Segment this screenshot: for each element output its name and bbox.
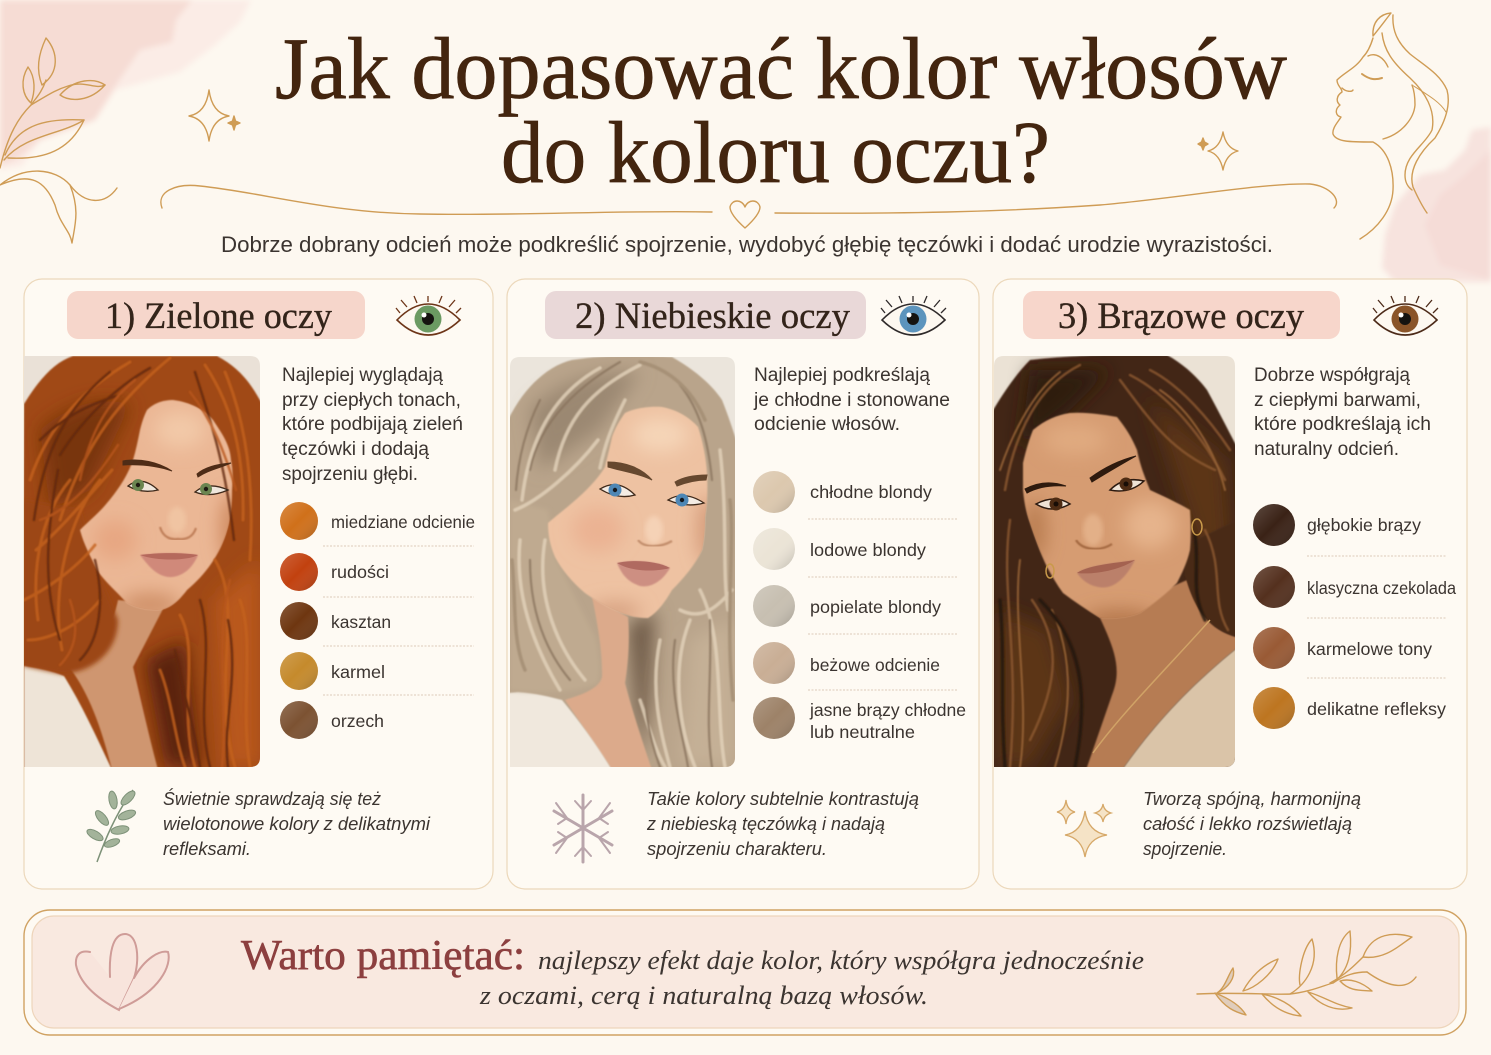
banner: remember (24, 910, 1466, 1035)
sparkle: top right (1198, 132, 1238, 170)
description text: przy ciepłych tonach, (282, 390, 461, 411)
face features (600, 462, 707, 586)
flourish with heart (161, 184, 1337, 228)
heading: green eyes (67, 291, 365, 339)
watercolor: bottom right of header (1382, 127, 1491, 282)
heading: brown eyes: 3) Brązowe oczy (1058, 296, 1304, 337)
icon: green sprig (85, 789, 137, 862)
face shading (1024, 424, 1176, 630)
note text: spojrzenie. (1143, 839, 1227, 859)
swatch list: jasne brązy chłodne (809, 700, 966, 720)
swatch list: lodowe blondy (810, 540, 926, 560)
leaves: top left line art (0, 38, 117, 243)
hair shading (530, 372, 735, 767)
swatch list: delikatne refleksy (1307, 699, 1446, 719)
heading: blue eyes: 2) Niebieskie oczy (575, 296, 850, 337)
note text: Świetnie sprawdzają się też (163, 788, 381, 809)
heading: green eyes: 1) Zielone oczy (105, 296, 332, 337)
description text (1254, 365, 1431, 460)
portrait: blonde hair (508, 356, 737, 770)
note text: refleksami. (163, 839, 251, 859)
icon: green eye (396, 296, 461, 335)
face features (123, 460, 231, 577)
face shading (93, 412, 244, 617)
swatch list: klasyczna czekolada (1307, 578, 1456, 598)
card background (24, 279, 493, 889)
face shading (574, 416, 707, 616)
swatch list: głębokie brązy (1307, 515, 1421, 535)
title (275, 21, 1287, 202)
description text: które podbijają zieleń (282, 414, 463, 435)
title: do koloru oczu? (501, 105, 1050, 202)
description text: które podkreślają ich (1254, 414, 1431, 435)
earrings (1046, 519, 1202, 578)
icon: blue eye (881, 296, 946, 335)
watercolor: top left (0, 0, 251, 170)
hair strands (24, 358, 251, 767)
note text (1143, 789, 1361, 859)
description text: Dobrze współgrają (1254, 365, 1410, 386)
panel: brown eyes (992, 279, 1467, 889)
card background (507, 279, 979, 889)
sparkle: top left (189, 90, 240, 141)
swatch list: chłodne blondy (810, 482, 932, 502)
description text (753, 365, 950, 435)
swatch list: popielate blondy (810, 597, 941, 617)
description text: spojrzeniu głębi. (282, 464, 418, 485)
icon: snowflake (554, 795, 612, 862)
swatch list: karmelowe tony (1307, 639, 1432, 659)
portrait: dark hair (992, 355, 1237, 770)
swatch list: karmel (331, 662, 385, 682)
note text: spojrzeniu charakteru. (647, 839, 827, 859)
hair strands (1005, 365, 1230, 767)
swatch list: orzech (331, 711, 384, 731)
swatch list (753, 471, 966, 742)
description text: je chłodne i stonowane (753, 390, 950, 411)
description text (282, 365, 463, 485)
icon: hearts (76, 934, 169, 1010)
title: Jak dopasować kolor włosów (275, 21, 1287, 118)
icon: gold branch (1197, 931, 1416, 1016)
woman profile line art (1333, 13, 1448, 239)
swatch list (280, 502, 475, 739)
description text: z ciepłymi barwami, (1254, 390, 1421, 411)
hair shading (1000, 370, 1235, 767)
note text: Takie kolory subtelnie kontrastują (647, 789, 919, 809)
description text: Najlepiej wyglądają (282, 365, 443, 386)
card background (993, 279, 1467, 889)
heading: brown eyes (1023, 291, 1340, 339)
swatch list: lub neutralne (810, 722, 915, 742)
description text: naturalny odcień. (1254, 439, 1399, 460)
note text: całość i lekko rozświetlają (1143, 814, 1352, 834)
description text: odcienie włosów. (754, 414, 900, 435)
note text: wielotonowe kolory z delikatnymi (163, 814, 431, 834)
swatch list (1253, 504, 1456, 729)
swatch list: beżowe odcienie (810, 655, 940, 675)
callout text: z oczami, cerą i naturalną bazą włosów. (479, 981, 928, 1010)
callout text (241, 933, 1144, 1010)
swatch list: kasztan (331, 612, 391, 632)
note text: z niebieską tęczówką i nadają (646, 814, 885, 834)
description text: tęczówki i dodają (282, 439, 429, 460)
note text: Tworzą spójną, harmonijną (1143, 789, 1361, 809)
icon: gold sparkles (1057, 800, 1111, 857)
banner frame (24, 910, 1466, 1035)
swatch list: rudości (331, 562, 389, 582)
face features (1025, 456, 1144, 588)
hair shading (40, 401, 260, 767)
note text (646, 789, 919, 859)
icon: brown eye (1373, 296, 1438, 335)
description text: Najlepiej podkreślają (754, 365, 930, 386)
swatch list: miedziane odcienie (331, 512, 475, 532)
panel: blue eyes (507, 279, 979, 889)
callout text: najlepszy efekt daje kolor, który współgra jednocześnie (538, 946, 1144, 975)
portrait: red hair (22, 356, 262, 770)
callout text: Warto pamiętać: (241, 933, 525, 979)
subtitle: Dobrze dobrany odcień może podkreślić spojrzenie, wydobyć głębię tęczówki i dodać urodzie wyrazistości. (221, 232, 1273, 257)
note text (163, 788, 431, 859)
hair strands (515, 365, 732, 767)
necklace (1093, 620, 1210, 753)
panel: green eyes (22, 279, 493, 889)
